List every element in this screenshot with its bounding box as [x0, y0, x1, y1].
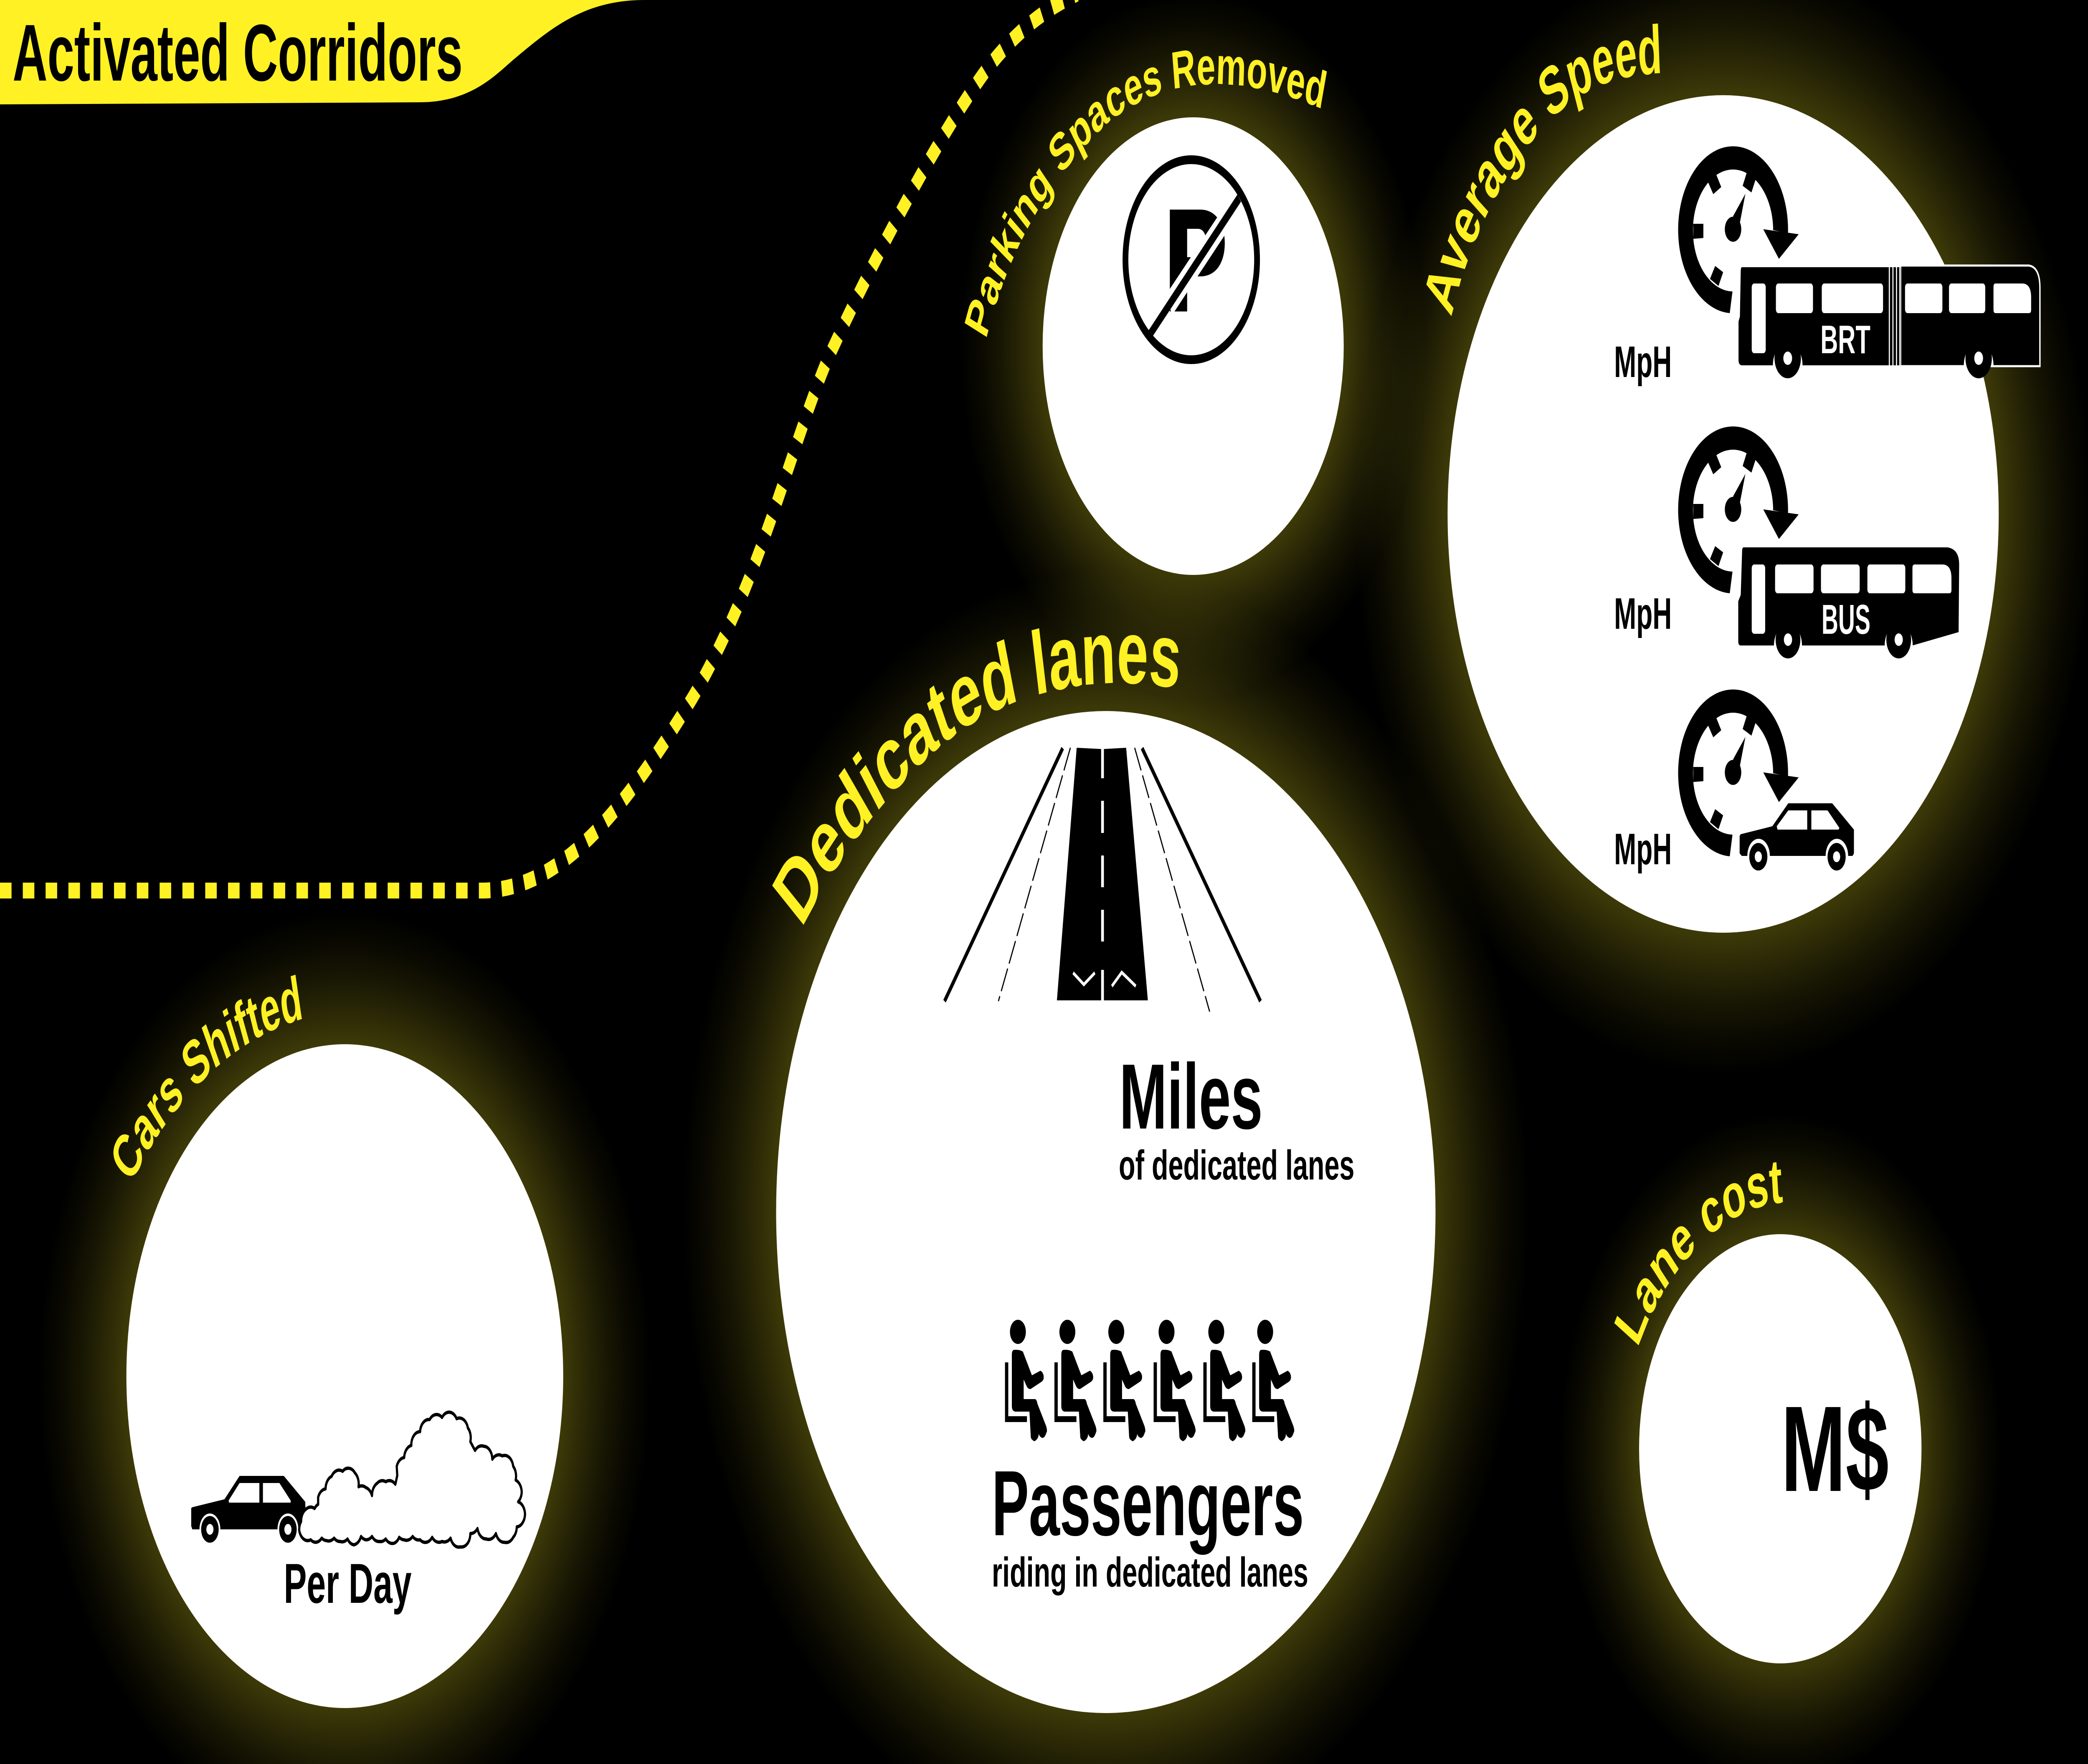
glow: average speed	[1354, 0, 2088, 1075]
dashed yellow corridor route	[0, 0, 1077, 891]
text: miles: Miles	[1119, 1045, 1263, 1148]
circle	[1447, 95, 1999, 933]
BRT label: BRT	[1820, 317, 1870, 362]
curved heading: Cars Shifted	[101, 963, 306, 1193]
text: of dedicated lanes: of dedicated lanes	[1119, 1141, 1354, 1188]
icon: seated passengers	[1005, 1320, 1294, 1441]
icon: BRT articulated bus	[1738, 266, 2040, 378]
text: BRT MpH: MpH	[1614, 337, 1672, 387]
curved heading: Dedicated lanes	[760, 601, 1184, 941]
icon: car	[191, 1476, 306, 1543]
icon: car speedometer	[1678, 689, 1799, 856]
panel: parking spaces removed	[957, 36, 1344, 575]
icon: bus	[1738, 547, 1959, 658]
icon: bus speedometer	[1678, 426, 1799, 593]
panel: dedicated lanes	[760, 601, 1436, 1713]
icon: road	[945, 748, 1260, 1012]
icon: exhaust cloud	[299, 1412, 525, 1547]
text: car MpH: MpH	[1614, 825, 1672, 874]
circle	[1639, 1234, 1921, 1663]
icon: no parking	[1125, 159, 1257, 360]
banner shape	[0, 0, 644, 104]
circle	[127, 1044, 563, 1708]
text: per day: Per Day	[284, 1552, 412, 1615]
title text: Activated Corridors	[13, 8, 463, 98]
text: riding in dedicated lanes: riding in dedicated lanes	[992, 1549, 1308, 1595]
glow: cars shifted	[38, 911, 651, 1764]
icon: BRT speedometer	[1678, 146, 1799, 313]
glow: dedicated lanes	[683, 569, 1529, 1764]
title banner	[0, 0, 644, 104]
text: passengers: Passengers	[992, 1451, 1304, 1555]
glow: parking	[960, 0, 1426, 700]
curved heading: Lane cost	[1605, 1146, 1784, 1356]
icon: car	[1740, 803, 1854, 871]
curved heading: Average Speed	[1414, 11, 1663, 323]
glow: lane cost	[1559, 1113, 2001, 1764]
text: bus MpH: MpH	[1614, 589, 1672, 639]
BUS label: BUS	[1822, 596, 1870, 643]
panel: lane cost	[1605, 1146, 1921, 1663]
panel: average speed	[1414, 11, 2040, 933]
circle	[1043, 117, 1344, 575]
panel: cars shifted	[101, 963, 563, 1708]
curved heading: Parking Spaces Removed	[957, 36, 1331, 344]
circle	[776, 711, 1436, 1713]
text: millions of dollars: M$	[1781, 1381, 1889, 1517]
